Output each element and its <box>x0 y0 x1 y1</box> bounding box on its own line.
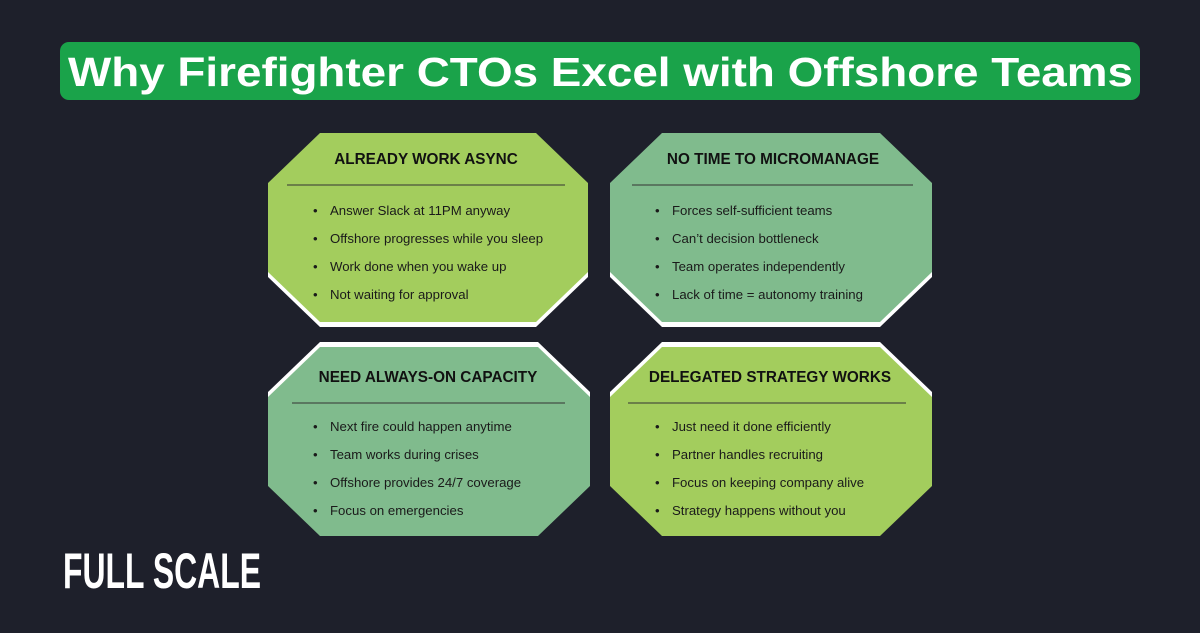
panel: already work async: Not waiting for approval <box>330 287 469 302</box>
panel: already work async: Offshore progresses while you sleep <box>330 231 543 246</box>
panel: need always-on capacity: Offshore provides 24/7 coverage <box>330 475 521 490</box>
panel: already work async: Work done when you wake up <box>330 259 506 274</box>
panel: delegated strategy works: Focus on keeping company alive <box>672 475 864 490</box>
panel: no time to micromanage: NO TIME TO MICROMANAGE <box>667 151 879 168</box>
panel: delegated strategy works: • <box>655 503 660 518</box>
title: Why Firefighter CTOs Excel with Offshore Teams <box>68 49 1133 95</box>
panel: no time to micromanage: • <box>655 231 660 246</box>
panel: need always-on capacity: • <box>313 503 318 518</box>
panel: no time to micromanage <box>610 133 932 327</box>
panel: already work async: Answer Slack at 11PM anyway <box>330 203 510 218</box>
panel: need always-on capacity: Next fire could happen anytime <box>330 419 512 434</box>
title <box>60 42 1140 100</box>
panel: need always-on capacity: Team works during crises <box>330 447 479 462</box>
panel: need always-on capacity: NEED ALWAYS-ON CAPACITY <box>319 369 537 386</box>
panel: no time to micromanage: Lack of time = autonomy training <box>672 287 863 302</box>
panel: delegated strategy works: DELEGATED STRATEGY WORKS <box>649 369 891 386</box>
panel: delegated strategy works: Strategy happens without you <box>672 503 846 518</box>
panel: delegated strategy works <box>610 342 932 536</box>
panel: need always-on capacity: • <box>313 475 318 490</box>
panel: no time to micromanage: • <box>655 287 660 302</box>
panel: no time to micromanage: • <box>655 203 660 218</box>
panel: need always-on capacity: Focus on emergencies <box>330 503 464 518</box>
panel: already work async: • <box>313 259 318 274</box>
panel: already work async: • <box>313 203 318 218</box>
panel: no time to micromanage: Forces self-sufficient teams <box>672 203 833 218</box>
panel: need always-on capacity: • <box>313 447 318 462</box>
panel: already work async: • <box>313 231 318 246</box>
panel: need always-on capacity: • <box>313 419 318 434</box>
panel: no time to micromanage: • <box>655 259 660 274</box>
panel: delegated strategy works: • <box>655 447 660 462</box>
panel: already work async: • <box>313 287 318 302</box>
panel: delegated strategy works: • <box>655 475 660 490</box>
panel: already work async <box>268 133 588 327</box>
panel: need always-on capacity <box>268 342 590 536</box>
panel: delegated strategy works: • <box>655 419 660 434</box>
panel: no time to micromanage: Team operates independently <box>672 259 845 274</box>
panel: delegated strategy works: Partner handles recruiting <box>672 447 823 462</box>
logo: full scale: FULL SCALE <box>63 543 261 599</box>
panel: already work async: ALREADY WORK ASYNC <box>334 151 518 168</box>
panel: no time to micromanage: Can’t decision bottleneck <box>672 231 819 246</box>
panel: delegated strategy works: Just need it done efficiently <box>672 419 831 434</box>
